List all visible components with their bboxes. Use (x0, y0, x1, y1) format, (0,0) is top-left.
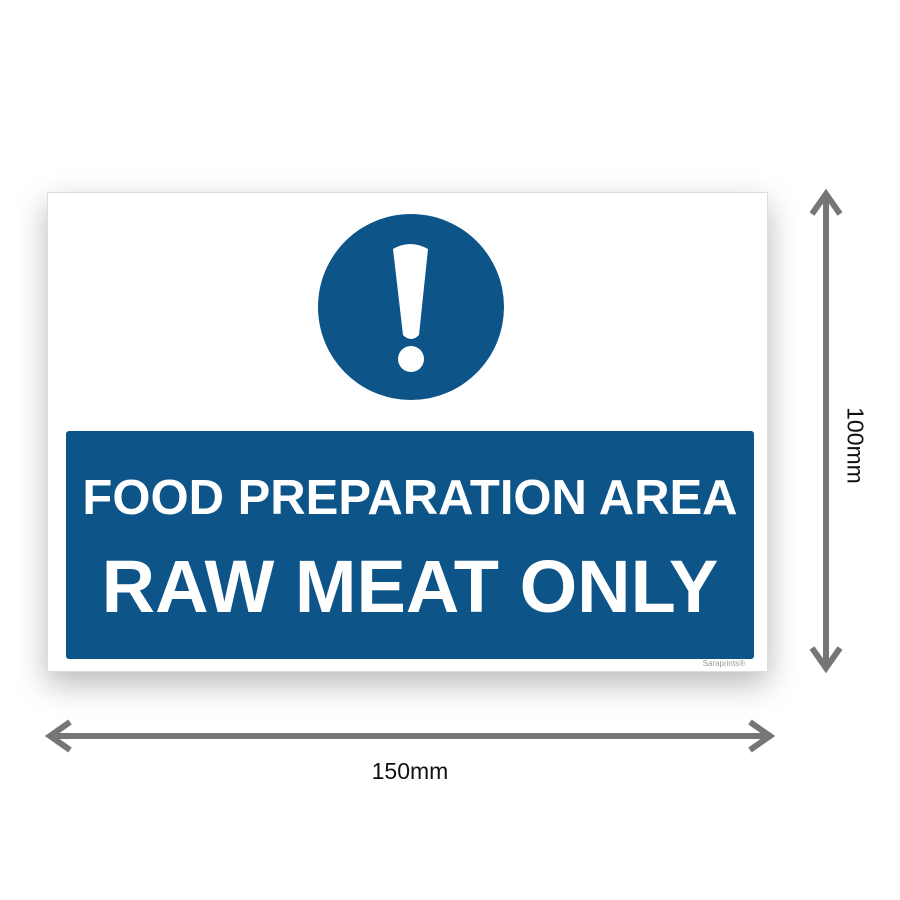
arrow: height (812, 194, 840, 668)
label: 150mm: 150mm (372, 758, 448, 784)
heading: food preparation area: FOOD PREPARATION AREA (82, 471, 738, 525)
icon: mandatory exclamation (318, 214, 504, 400)
sign (47, 192, 768, 672)
panel: text banner (66, 431, 754, 659)
heading: raw meat only: RAW MEAT ONLY (102, 545, 718, 628)
brand text: Saraprints® (703, 659, 745, 668)
label: 100mm: 100mm (842, 407, 868, 484)
